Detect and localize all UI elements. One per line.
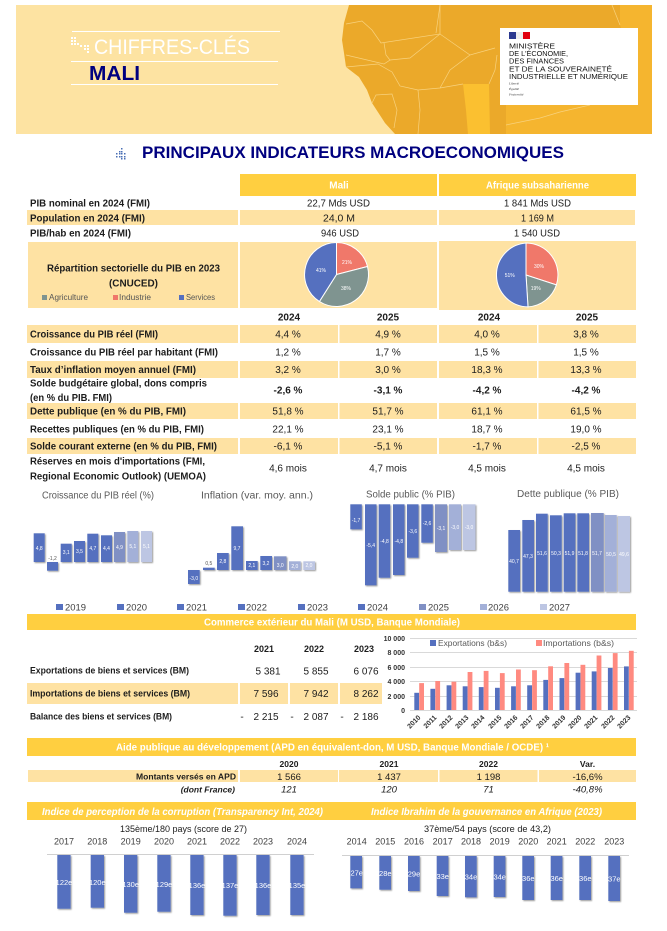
legend: years: 2023 <box>307 602 328 612</box>
chart: real GDP growth: -1,2 <box>48 556 57 562</box>
aid table: 2020 <box>280 759 299 769</box>
row: budget balance: -3,1 % <box>374 386 403 396</box>
row: reserves: Regional Economic Outlook) (UEMOA) <box>30 472 206 482</box>
chart: public balance: Solde public (% PIB) <box>366 490 455 500</box>
pie chart: Mali <box>305 242 369 306</box>
row: growth per capita: 1,7 % <box>375 348 401 358</box>
map of West Africa <box>342 5 652 134</box>
aid table: Var. <box>580 759 595 769</box>
legend: years: 2025 <box>428 602 449 612</box>
heading text: PRINCIPAUX INDICATEURS MACROECONOMIQUES <box>142 144 564 162</box>
trade table: 2 186 <box>353 712 379 723</box>
trade table: 2022 <box>304 644 324 654</box>
pie chart: Mali: 21% <box>342 260 353 266</box>
pie chart: Sub-Saharan Africa <box>496 243 558 307</box>
row: sector breakdown <box>28 241 636 310</box>
table header <box>240 174 636 196</box>
row: growth per capita <box>30 348 599 358</box>
row: population: 24,0 M <box>323 214 355 224</box>
panel: corruption index: 120e <box>89 878 106 887</box>
row: inflation: 13,3 % <box>570 365 602 376</box>
row: reserves: 4,7 mois <box>369 464 407 474</box>
panel: Ibrahim governance index <box>342 806 629 901</box>
pie chart: Sub-Saharan Africa: 30% <box>534 264 545 270</box>
year header <box>278 312 599 324</box>
row: PIB per capita <box>30 228 560 240</box>
chart x axis: 2011 <box>423 714 438 730</box>
legend: years: 2026 <box>488 602 509 612</box>
trade table: 7 596 <box>253 689 279 700</box>
row: public revenue <box>30 424 602 436</box>
chart legend: Importations (b&s) <box>543 638 614 648</box>
trade table: 5 855 <box>303 666 329 678</box>
panel: Ibrahim governance index: 2023 <box>604 836 624 846</box>
row: PIB nominal <box>30 198 571 210</box>
main heading <box>116 144 564 162</box>
aid table: 1 437 <box>377 772 401 783</box>
row: public revenue: Recettes publiques (en % du PIB, FMI) <box>30 424 204 436</box>
logo: DES FINANCES <box>509 58 564 66</box>
table header: Mali <box>329 180 349 192</box>
panel: Ibrahim governance index: 33e <box>436 872 449 881</box>
row: current account: -2,5 % <box>572 442 601 452</box>
panel: Ibrahim governance index: 27e <box>350 868 363 878</box>
aid table: 121 <box>281 784 297 796</box>
panel: corruption index: 2024 <box>287 836 307 846</box>
chart x axis: 2020 <box>567 714 583 730</box>
row: growth: 4,4 % <box>275 330 301 340</box>
bar chart: exports and imports: 0 <box>401 708 405 715</box>
panel: corruption index: 136e <box>189 881 205 890</box>
panel: corruption index: 2021 <box>187 836 207 846</box>
row: reserves: 4,5 mois <box>468 464 506 474</box>
row: budget balance: -4,2 % <box>473 386 502 396</box>
panel: Ibrahim governance index: 34e <box>493 872 506 882</box>
chart x axis: 2010 <box>406 714 422 730</box>
panel: key indicators table <box>27 174 636 482</box>
trade table: 7 942 <box>303 689 329 700</box>
year header: 2025 <box>576 312 599 324</box>
chart: real GDP growth: 5,1 <box>143 544 150 550</box>
panel: corruption index: 2018 <box>87 836 107 846</box>
row: public revenue: 23,1 % <box>372 424 404 436</box>
chart x axis: 2016 <box>503 714 519 730</box>
chart: real GDP growth: 5,1 <box>129 544 136 550</box>
panel: corruption index: 2020 <box>154 836 174 846</box>
panel: corruption index: 2023 <box>253 836 273 846</box>
chart: public balance: -2,6 <box>423 521 432 527</box>
panel: Ibrahim governance index: 2019 <box>490 836 510 846</box>
chart: public balance: -3,6 <box>408 529 417 535</box>
legend: sectors: Industrie <box>119 293 152 302</box>
panel: corruption index: 137e <box>222 881 238 890</box>
aid table: -40,8% <box>572 784 603 796</box>
panel: Ibrahim governance index: 29e <box>408 870 420 878</box>
chart: public debt: 40,7 <box>509 559 519 565</box>
panel: corruption index: 129e <box>156 880 172 889</box>
panel: corruption index: 122e <box>56 878 72 887</box>
icon: dots <box>71 37 89 53</box>
panel: Ibrahim governance index: 36e <box>550 874 563 883</box>
chart: real GDP growth: 3,5 <box>76 549 83 555</box>
legend: years: 2027 <box>549 602 570 612</box>
row: budget balance: -2,6 % <box>274 386 303 396</box>
chart x axis: 2023 <box>616 714 632 730</box>
chart: real GDP growth: 4,9 <box>116 545 123 551</box>
panel: Ibrahim governance index: 2016 <box>404 836 424 846</box>
row: budget balance: (en % du PIB. FMI) <box>30 393 112 404</box>
pie chart: Sub-Saharan Africa: 51% <box>505 273 515 279</box>
row: growth per capita: 1,2 % <box>275 348 301 358</box>
bar chart: exports and imports <box>384 636 637 730</box>
chart x axis: 2019 <box>551 714 567 730</box>
chart x axis: 2018 <box>535 714 551 730</box>
row: PIB per capita: PIB/hab en 2024 (FMI) <box>30 228 131 240</box>
trade table: - <box>290 712 294 723</box>
trade table: - <box>340 712 344 723</box>
logo <box>500 28 638 105</box>
panel: corruption index: 136e <box>255 881 271 890</box>
panel: Ibrahim governance index: 2015 <box>375 836 395 846</box>
row: inflation: Taux d’inflation moyen annuel (FMI) <box>30 365 196 376</box>
icon: heading dots <box>116 148 126 160</box>
chart: public debt <box>508 489 630 592</box>
panel: Ibrahim governance index: 34e <box>465 872 477 882</box>
trade table <box>27 644 382 723</box>
row: growth: 4,0 % <box>474 330 500 340</box>
row: growth: 4,9 % <box>375 330 401 340</box>
row: PIB nominal: 22,7 Mds USD <box>307 198 370 210</box>
bar chart: exports and imports: 2 000 <box>387 694 405 701</box>
pie chart: Sub-Saharan Africa: 19% <box>531 286 541 292</box>
chart: real GDP growth: 4,8 <box>36 546 43 552</box>
chart x axis: 2022 <box>600 714 616 730</box>
chart x axis: 2014 <box>470 714 486 730</box>
row: public debt <box>27 403 636 419</box>
legend: sectors <box>42 293 215 302</box>
row: current account: -6,1 % <box>274 442 303 452</box>
panel: Ibrahim governance index: 28e <box>379 869 392 878</box>
bar chart: exports and imports: 6 000 <box>387 665 405 672</box>
chart x axis: 2015 <box>487 714 503 730</box>
panel: corruption index: Indice de perception de la corruption (Transparency Int, 2024) <box>42 806 323 818</box>
panel: Ibrahim governance index: 36e <box>522 874 535 883</box>
chart: public balance: -5,4 <box>366 543 375 549</box>
logo: ET DE LA SOUVERAINETÉ <box>509 64 612 74</box>
row: public debt: 51,7 % <box>372 406 404 418</box>
bar chart: exports and imports: 10 000 <box>384 636 405 643</box>
panel: corruption index: 2019 <box>121 836 141 846</box>
row: current account: -5,1 % <box>374 442 403 452</box>
panel: Ibrahim governance index: 2017 <box>433 836 453 846</box>
row: reserves: 4,6 mois <box>269 464 307 474</box>
chart: public balance: -4,8 <box>380 539 389 545</box>
panel: corruption index <box>42 806 323 916</box>
trade table: 2023 <box>354 644 374 654</box>
chart: inflation: 3,0 <box>277 563 284 569</box>
chart: public debt: 47,3 <box>523 554 533 560</box>
pie chart: Mali: 38% <box>341 286 352 292</box>
aid table: 2021 <box>380 759 399 769</box>
chart: inflation: Inflation (var. moy. ann.) <box>201 490 313 502</box>
aid table: 1 566 <box>277 772 301 783</box>
row: PIB per capita: 946 USD <box>321 228 359 240</box>
year header: 2024 <box>478 312 501 324</box>
chart: inflation: 2,1 <box>248 563 255 569</box>
chart: inflation: 2,8 <box>219 559 226 565</box>
aid table: -16,6% <box>572 772 603 783</box>
row: growth: Croissance du PIB réel (FMI) <box>30 330 158 340</box>
row: PIB per capita: 1 540 USD <box>514 228 560 240</box>
section heading: aid <box>27 738 636 756</box>
row: growth: 3,8 % <box>573 330 599 340</box>
aid table: 71 <box>483 784 494 796</box>
bar chart: exports and imports: 8 000 <box>387 650 405 657</box>
chart: public debt: 51,8 <box>578 551 588 557</box>
section heading: trade <box>27 614 636 630</box>
row: current account: Solde courant externe (en % du PIB, FMI) <box>30 442 217 452</box>
trade table: 2 087 <box>303 712 329 723</box>
trade table: 5 381 <box>255 666 281 678</box>
chart: real GDP growth: Croissance du PIB réel (%) <box>42 490 154 502</box>
row: budget balance: -4,2 % <box>572 386 601 396</box>
row: public debt: 61,5 % <box>570 406 602 418</box>
row: public revenue: 19,0 % <box>570 424 602 436</box>
chart: public debt: 49,6 <box>619 552 629 558</box>
row: public revenue: 18,7 % <box>471 424 503 436</box>
legend: years: 2020 <box>126 602 147 612</box>
chart: public balance: -1,7 <box>352 518 361 524</box>
trade table: Balance des biens et services (BM) <box>30 712 172 722</box>
row: current account <box>27 438 636 454</box>
year header: 2025 <box>377 312 400 324</box>
legend: years: 2021 <box>186 602 207 612</box>
panel: Ibrahim governance index: 37e <box>608 874 621 884</box>
chart x axis: 2017 <box>519 714 535 730</box>
chart: inflation: 3,2 <box>263 561 270 567</box>
row: public debt: 51,8 % <box>272 406 304 418</box>
chart legend: Exportations (b&s) <box>438 638 507 648</box>
legend: years: 2019 <box>65 602 86 612</box>
chart: real GDP growth: 3,1 <box>63 550 70 556</box>
row: growth per capita: 1,5 % <box>474 348 500 358</box>
chart: inflation <box>188 490 315 584</box>
row: public debt: Dette publique (en % du PIB, FMI) <box>30 406 186 418</box>
row: growth per capita: 1,5 % <box>573 348 599 358</box>
row: population <box>27 210 635 225</box>
aid table: 1 198 <box>477 772 500 783</box>
chart: inflation: -3,0 <box>189 576 198 582</box>
chart: real GDP growth <box>34 490 154 571</box>
chart: public balance <box>350 490 476 585</box>
panel: Ibrahim governance index: 2022 <box>575 836 595 846</box>
panel: Ibrahim governance index: Indice Ibrahim de la gouvernance en Afrique (2023) <box>371 806 602 818</box>
panel: development aid <box>27 738 636 796</box>
section heading: trade: Commerce extérieur du Mali (M USD, Banque Mondiale) <box>204 618 460 628</box>
trade table: - <box>240 712 244 723</box>
chart: public balance: -3,1 <box>437 526 446 532</box>
row: inflation: 3,0 % <box>375 365 401 376</box>
chart: inflation: 9,7 <box>234 546 241 552</box>
table header: Afrique subsaharienne <box>486 180 589 192</box>
row: population: Population en 2024 (FMI) <box>30 214 145 224</box>
row: reserves: Réserves en mois d'importations (FMI, <box>30 456 205 468</box>
row: reserves: 4,5 mois <box>567 464 605 474</box>
logo: Liberté <box>508 82 520 86</box>
chart x axis: 2013 <box>454 714 470 730</box>
row: sector breakdown: (CNUCED) <box>109 278 158 290</box>
panel: corruption index: 135e <box>289 881 305 890</box>
chart x axis: 2021 <box>583 714 599 730</box>
trade table: Importations de biens et services (BM) <box>30 688 190 700</box>
row: PIB nominal: PIB nominal en 2024 (FMI) <box>30 198 150 210</box>
aid table: Montants versés en APD <box>136 772 236 782</box>
row: budget balance: Solde budgétaire global, dons compris <box>30 378 207 390</box>
pie chart: Mali: 41% <box>316 268 327 274</box>
chart: inflation: 2,0 <box>306 563 313 569</box>
row: reserves <box>30 456 605 482</box>
trade table: Exportations de biens et services (BM) <box>30 666 189 676</box>
aid table <box>28 759 636 796</box>
logo: Fraternité <box>508 92 524 96</box>
logo: DE L'ÉCONOMIE, <box>509 49 568 58</box>
aid table: (dont France) <box>181 784 235 794</box>
chart: public debt: 50,3 <box>551 551 561 557</box>
legend: years: 2022 <box>246 602 267 612</box>
chart legend <box>430 638 614 648</box>
panel: Ibrahim governance index: 2021 <box>547 836 567 846</box>
row: growth per capita: Croissance du PIB réel par habitant (FMI) <box>30 348 218 358</box>
chart: public debt: Dette publique (% PIB) <box>517 489 619 500</box>
legend: sectors: Services <box>186 293 215 302</box>
country name: MALI <box>89 63 140 85</box>
row: inflation <box>27 361 636 378</box>
panel: foreign trade <box>27 614 637 730</box>
legend: sectors: Agriculture <box>49 293 89 302</box>
chart: inflation: 0,5 <box>205 561 212 567</box>
banner <box>16 5 652 134</box>
heading lines <box>71 32 280 84</box>
logo: MINISTÈRE <box>509 42 555 50</box>
chart: real GDP growth: 4,4 <box>103 546 110 552</box>
trade table: 8 262 <box>353 689 379 700</box>
trade table: 2021 <box>254 644 274 654</box>
panel: Ibrahim governance index: 2018 <box>461 836 481 846</box>
logo: Égalité <box>508 86 520 91</box>
panel: Ibrahim governance index: 2014 <box>347 836 367 846</box>
legend: years: 2024 <box>367 602 388 612</box>
row: growth <box>27 325 636 343</box>
panel: corruption index: 130e <box>122 880 139 889</box>
chart: public balance: -4,8 <box>394 539 403 545</box>
chart: public debt: 51,6 <box>537 551 547 557</box>
panel: corruption index: 2022 <box>220 836 240 846</box>
chart x axis <box>406 714 632 730</box>
chart: public debt: 50,5 <box>606 552 616 558</box>
panel: Ibrahim governance index: 2020 <box>518 836 538 846</box>
chart: inflation: 2,0 <box>291 564 298 570</box>
row: population: 1 169 M <box>521 214 554 224</box>
row: inflation: 18,3 % <box>471 365 503 376</box>
row: inflation: 3,2 % <box>275 365 301 376</box>
trade table: 6 076 <box>353 666 379 678</box>
trade table: 2 215 <box>253 712 279 723</box>
banner title: CHIFFRES-CLÉS <box>94 36 250 59</box>
chart: real GDP growth: 4,7 <box>89 546 96 552</box>
panel: Ibrahim governance index: 37ème/54 pays (score de 43,2) <box>424 824 551 835</box>
row: PIB nominal: 1 841 Mds USD <box>504 198 571 210</box>
aid table: 2022 <box>479 759 498 769</box>
section heading: aid: Aide publique au développement (APD en équivalent-don, M USD, Banque Mondiale / OCDE) ¹ <box>116 742 550 754</box>
row: public debt: 61,1 % <box>471 406 503 418</box>
row: current account: -1,7 % <box>473 442 502 452</box>
panel: corruption index: 2017 <box>54 836 74 846</box>
logo: INDUSTRIELLE ET NUMÉRIQUE <box>509 72 628 81</box>
chart: public balance: -3,0 <box>451 525 460 531</box>
panel: Ibrahim governance index: 36e <box>579 874 592 883</box>
aid table: 120 <box>381 784 398 796</box>
bar chart: exports and imports: 4 000 <box>387 679 405 686</box>
chart: public debt: 51,7 <box>592 551 602 557</box>
panel: corruption index: 135ème/180 pays (score de 27) <box>120 824 247 835</box>
section heading band: governance <box>27 802 636 820</box>
chart x axis: 2012 <box>438 714 454 730</box>
row: public revenue: 22,1 % <box>272 424 304 436</box>
chart: public balance: -3,0 <box>465 525 474 531</box>
legend: years <box>56 602 570 612</box>
chart: public debt: 51,9 <box>565 551 575 557</box>
row: sector breakdown: Répartition sectorielle du PIB en 2023 <box>47 264 220 274</box>
row: budget balance <box>30 378 601 404</box>
year header: 2024 <box>278 312 301 324</box>
